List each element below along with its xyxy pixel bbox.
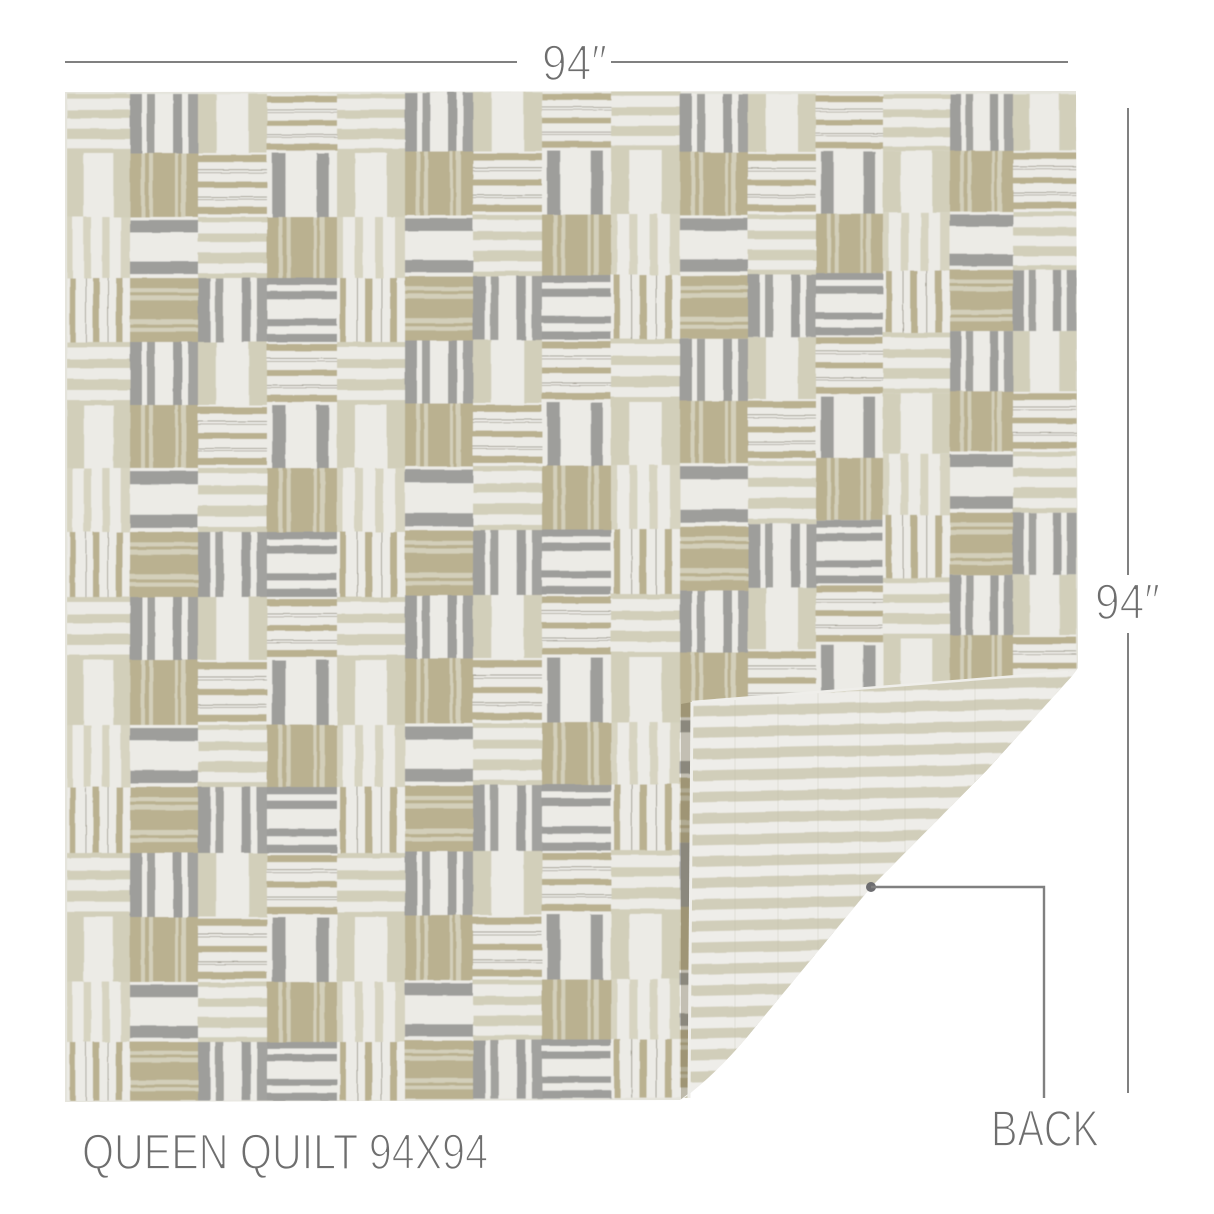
patchwork column 8 [542, 92, 612, 1098]
dimension: right height line and 94 inch label: 94″ [1095, 574, 1160, 630]
shadow beside folded corner [681, 702, 690, 1100]
patchwork column 11 [748, 94, 817, 1081]
patchwork column 1 [67, 94, 131, 1101]
caption: Queen Quilt 94X94: QUEEN QUILT 94X94 [82, 1124, 488, 1180]
patchwork column 14 [949, 94, 1014, 806]
folded back corner with striped backing [680, 660, 1080, 1100]
dimension: top width line and 94 inch label: 94″ [542, 35, 607, 91]
patchwork column 10 [680, 94, 749, 1087]
patchwork column 2 [130, 94, 199, 1101]
patchwork column 12 [814, 94, 884, 948]
patchwork column 15 [1012, 93, 1077, 740]
patchwork column 5 [337, 94, 406, 1101]
label: BACK: BACK [991, 1100, 1099, 1157]
patchwork column 9 [611, 91, 681, 1098]
patchwork column 13 [882, 94, 951, 870]
callout: back pointer line and dot [866, 882, 1044, 1098]
patchwork column 4 [267, 94, 338, 1101]
quilt front: patchwork of striped blocks [60, 88, 1082, 1106]
patchwork column 6 [405, 92, 474, 1099]
patchwork column 3 [198, 94, 268, 1101]
patchwork column 7 [473, 92, 543, 1099]
